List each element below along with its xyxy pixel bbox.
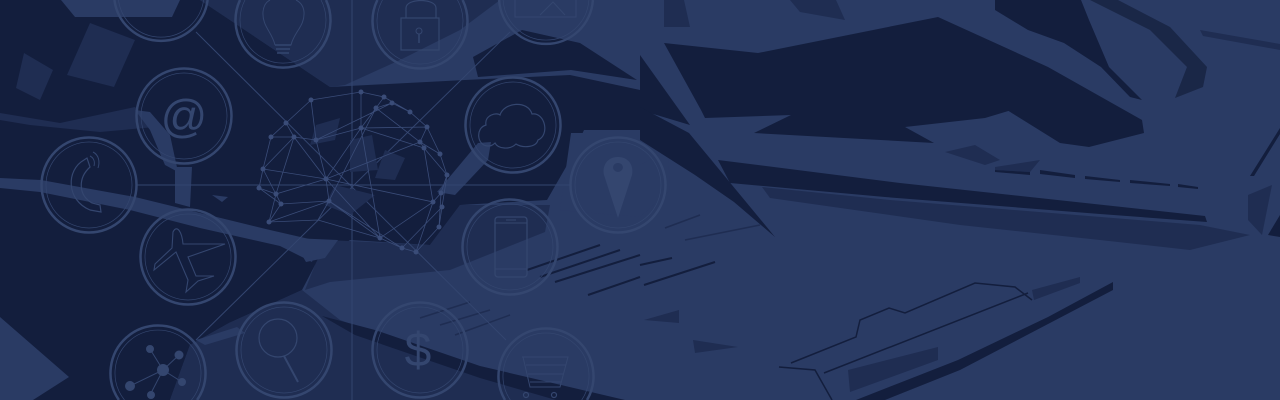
icon: at sign: @ <box>161 90 207 142</box>
icon: airplane <box>140 210 236 304</box>
icon: top right image <box>499 0 593 44</box>
icon ring: top left image <box>114 0 208 41</box>
photo: laptop shadow and edge <box>718 128 1280 250</box>
icon: telephone <box>42 138 136 232</box>
icon: location pin <box>570 138 666 232</box>
icon: molecule network <box>111 326 206 400</box>
photo: pie chart pieces on report <box>644 310 738 353</box>
icon: at sign <box>136 68 232 164</box>
icon: dollar sign: $ <box>405 324 431 377</box>
photo: paper edge shadow <box>322 316 625 400</box>
network cross lines <box>137 0 570 400</box>
photo: second hand fingers <box>664 0 1280 100</box>
photo: pen <box>640 107 775 237</box>
network globe <box>256 90 450 254</box>
icon: dollar sign <box>372 302 468 398</box>
photo: lower left paper and sleeve <box>170 290 560 400</box>
photo: report chart lines <box>420 215 760 335</box>
photo: left hand and sleeve shadows <box>0 0 670 400</box>
icon: magnifying glass <box>236 302 332 398</box>
icon: cloud <box>466 78 560 172</box>
photo: pen hand shadow <box>640 55 690 125</box>
photo: clipboard clip <box>779 277 1113 400</box>
icon: padlock <box>372 0 468 69</box>
icon: shopping cart <box>499 329 594 400</box>
icon: mobile phone <box>462 200 558 294</box>
icon: light bulb <box>236 0 330 68</box>
photo: typing hand <box>664 17 1144 147</box>
